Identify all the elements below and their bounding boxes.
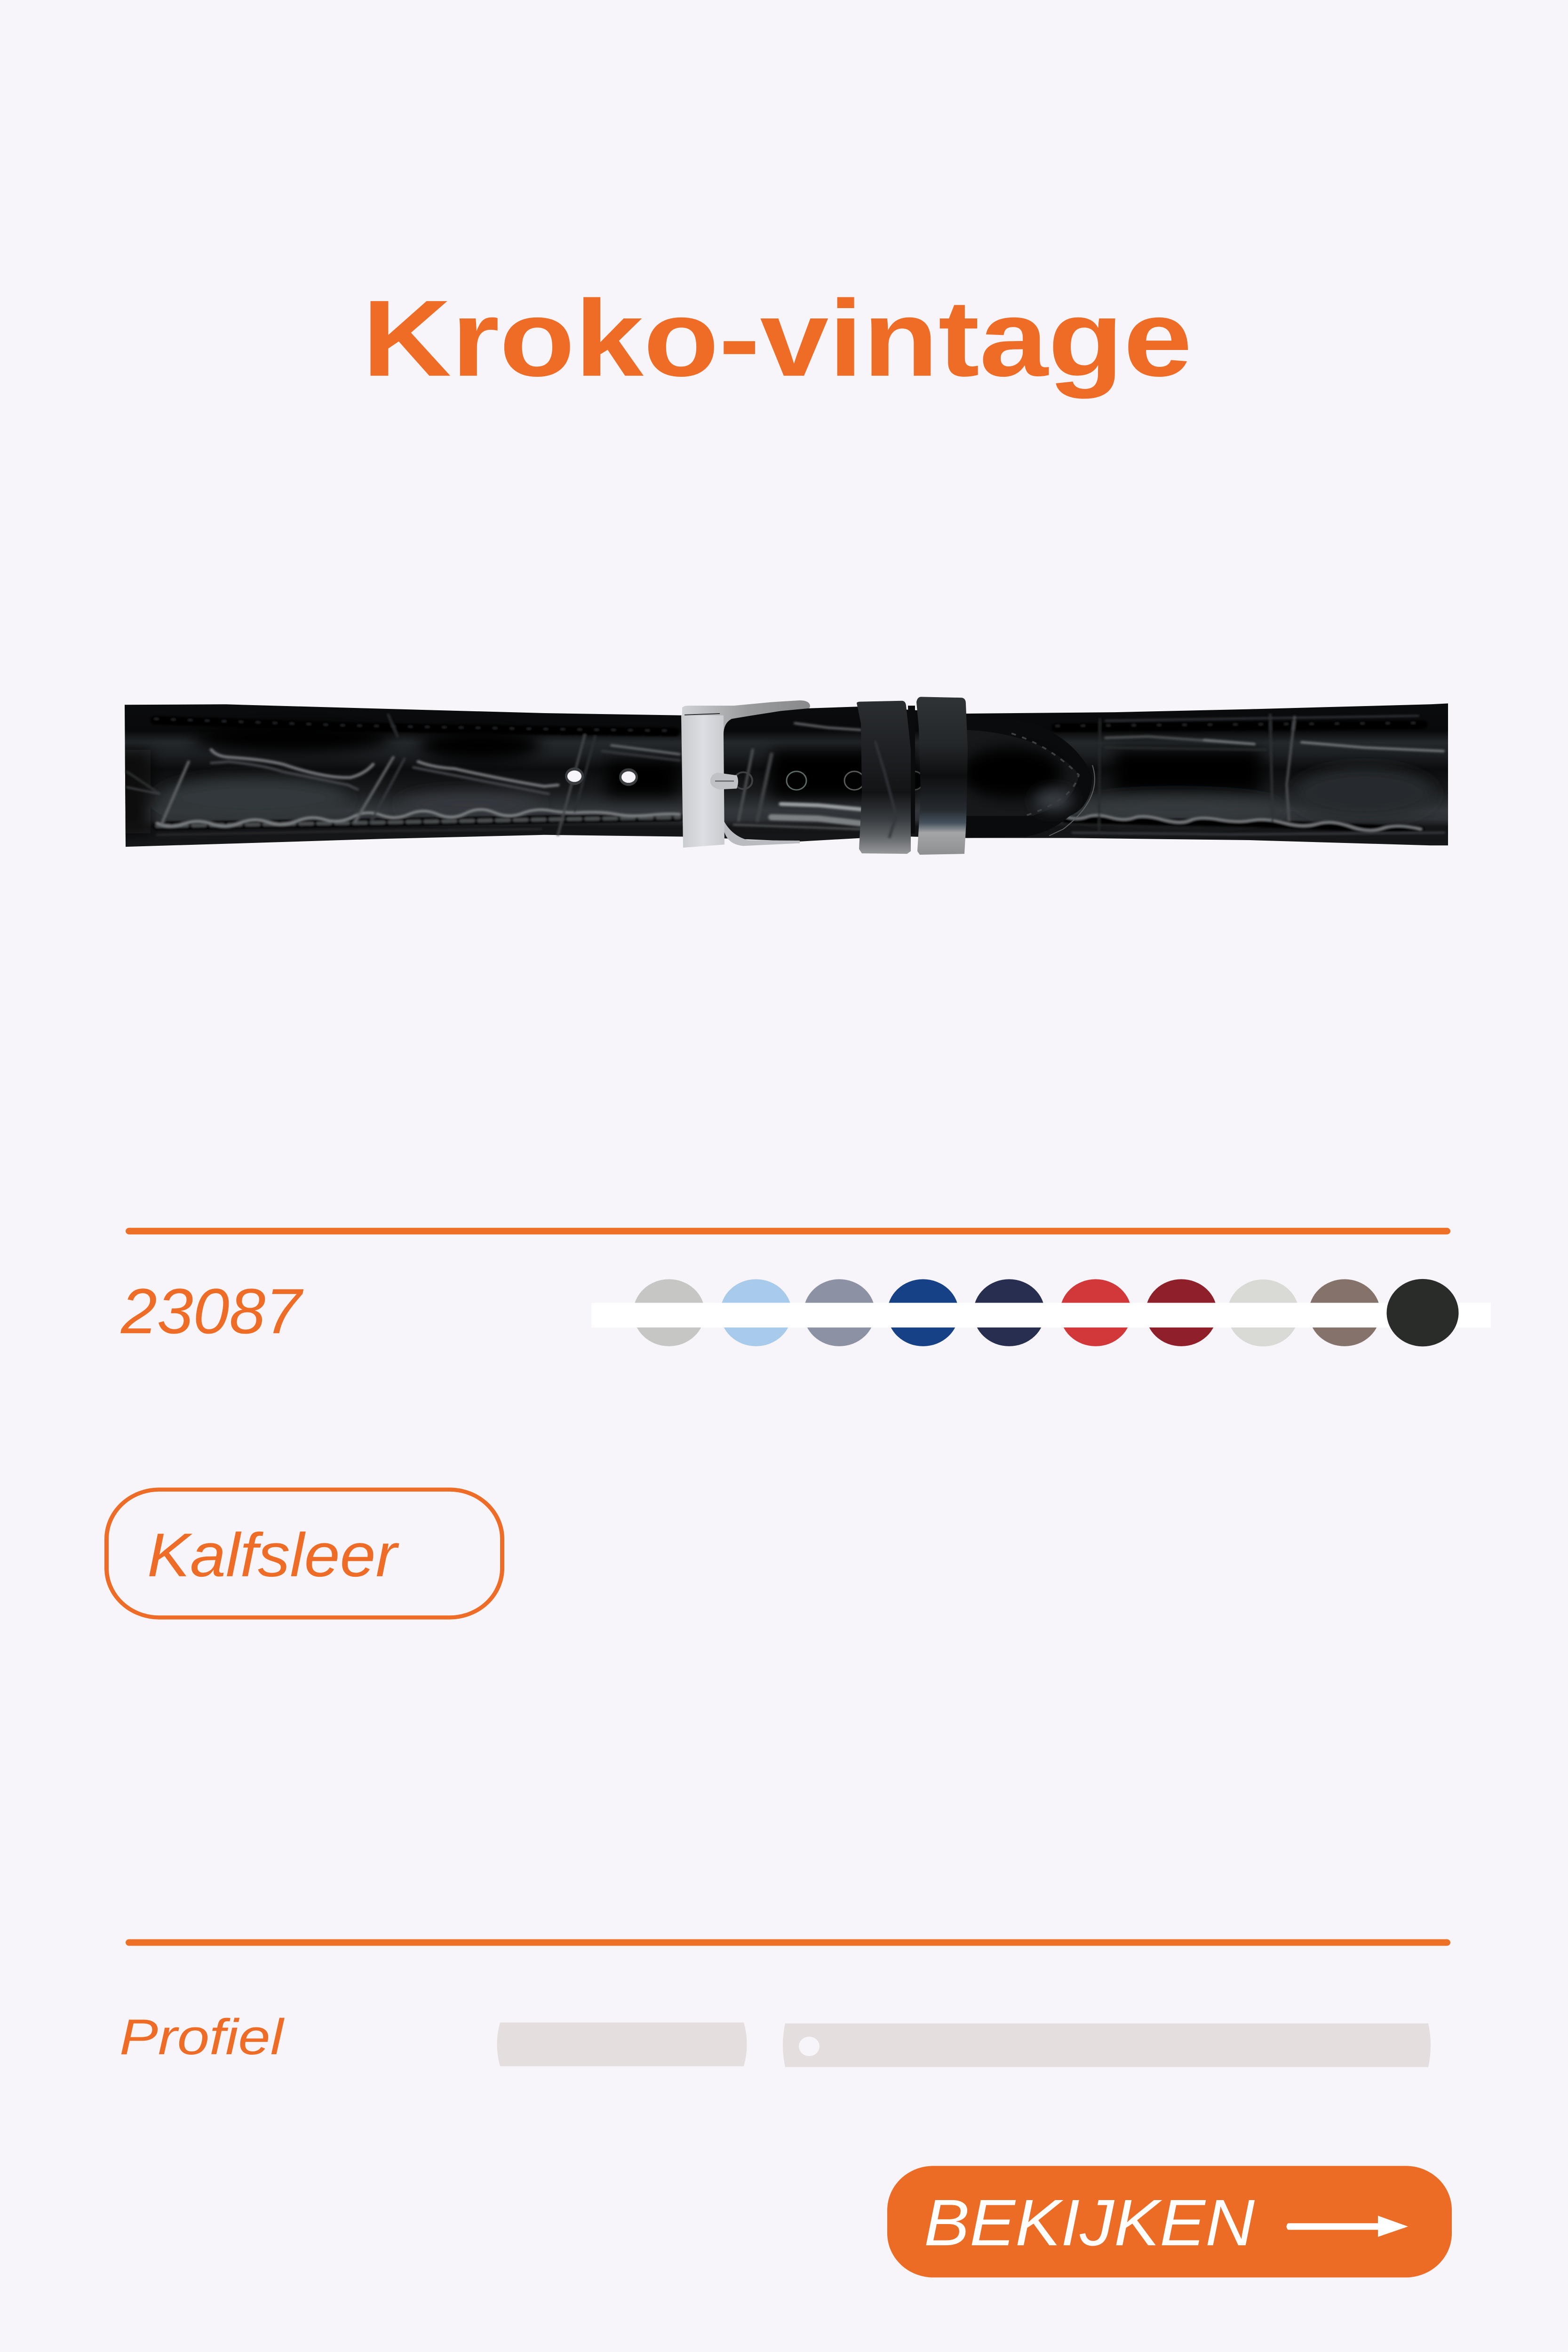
right ridges and seams xyxy=(1106,737,1254,744)
article number: 23087 xyxy=(120,1275,304,1347)
strap loops xyxy=(857,697,968,855)
crocodile ridges left xyxy=(211,750,373,778)
material tag xyxy=(106,1490,502,1617)
leather shading xyxy=(113,724,1435,834)
title: Kroko-vintage xyxy=(362,278,1192,399)
bottom divider xyxy=(126,1939,1450,1946)
profile shape: short part xyxy=(497,2023,747,2066)
strap holes xyxy=(565,767,923,790)
vertical seams left xyxy=(162,762,189,823)
view button: BEKIJKEN xyxy=(924,2185,1255,2259)
strap tip xyxy=(960,717,1095,838)
strap body xyxy=(125,703,1448,847)
material tag: Kalfsleer xyxy=(147,1520,399,1589)
watch strap photo xyxy=(113,697,1448,855)
buckle xyxy=(681,700,810,848)
top divider xyxy=(126,1228,1450,1234)
arrow xyxy=(1286,2216,1408,2237)
stitching and ridges xyxy=(127,715,1444,835)
profile shape: long part xyxy=(783,2024,1431,2067)
top stitching xyxy=(155,720,679,732)
profile label: Profiel xyxy=(119,2009,285,2065)
colour swatches xyxy=(591,1279,1491,1346)
view button xyxy=(887,2166,1452,2278)
center ridges xyxy=(781,804,860,809)
bottom stitching xyxy=(157,817,679,826)
